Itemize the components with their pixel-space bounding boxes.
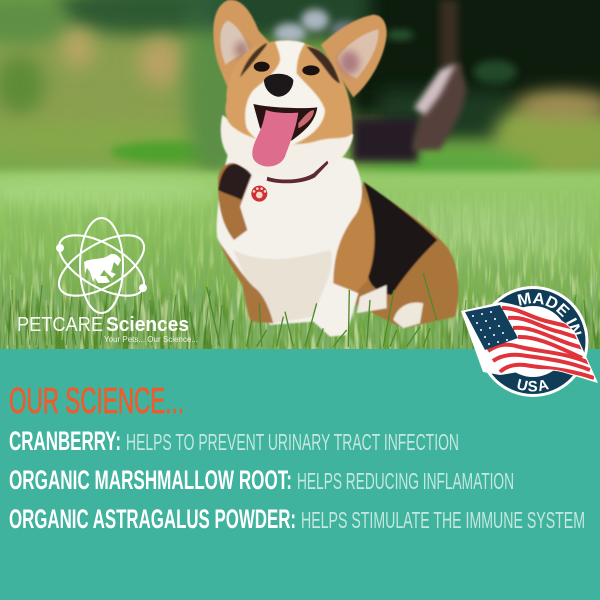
dog right eye [302,65,320,75]
dog body [217,143,459,337]
heading: our science: OUR SCIENCE... [9,380,184,421]
badge: made in USA [461,286,598,397]
corgi dog [207,0,459,347]
dog mouth [253,104,317,141]
dog haunch white [393,302,423,328]
line: cranberry [9,426,459,456]
dog right ear pink [339,51,359,75]
dog black saddle [363,182,437,295]
background: blurred garden chair [352,0,467,162]
flag white outline [461,302,598,383]
dog right ear [321,15,387,97]
photo: corgi sitting in grass [0,0,600,372]
logo atom icon [50,218,153,313]
cranberry label: CRANBERRY: [9,426,121,456]
badge text made in: MADE IN [518,292,582,335]
dog left shoulder black [218,164,252,200]
dog right brow [307,47,340,83]
dog neck ruff [220,114,354,170]
dog left eye [254,62,270,72]
dog rear patch white [357,285,387,313]
dog tongue [252,110,298,167]
dog left leg [220,243,273,323]
grass blades left [8,285,222,345]
logo: Pet Care Sciences [17,218,198,344]
logo tagline: Your Pets... Our Science... [104,335,198,344]
astragalus label: ORGANIC ASTRAGALUS POWDER: [9,504,296,534]
badge inner white [498,306,568,377]
flag stripes [488,308,594,378]
dog collar [267,161,328,183]
dog right ear inner [338,29,378,78]
dog belly shadow [233,250,332,323]
dog shoulder tan [333,197,374,298]
grass blades light left [10,275,212,345]
flag [461,302,598,383]
badge text USA: USA [518,378,549,392]
dog nose [264,74,293,97]
dog left ear pink [235,41,248,59]
dog face blaze [245,40,325,147]
dog tag [251,186,267,202]
badge navy ring [480,289,586,394]
line: marshmallow root [9,465,514,495]
dog mouth pink [298,110,314,128]
dog left shoulder [218,163,252,240]
marshmallow label: ORGANIC MARSHMALLOW ROOT: [9,465,292,495]
background: blurred meadow and trees [0,0,600,372]
dog front grass [207,273,437,347]
teal panel [0,349,600,600]
logo wordmark bold: Sciences [106,314,189,336]
dog head [225,41,352,144]
flag canton [465,305,518,350]
badge white ring [478,286,588,397]
flag stars [472,311,508,345]
background: grass texture [0,210,600,349]
grass blades right [462,295,588,345]
dog chest white [217,143,362,337]
logo wordmark thin: PETCARE [17,314,103,336]
dog left ear [213,0,269,95]
dog left ear inner [220,21,249,65]
line: astragalus powder [9,504,585,534]
dog left brow [240,43,267,77]
dog rump [355,182,460,328]
logo animals icon [84,254,121,283]
